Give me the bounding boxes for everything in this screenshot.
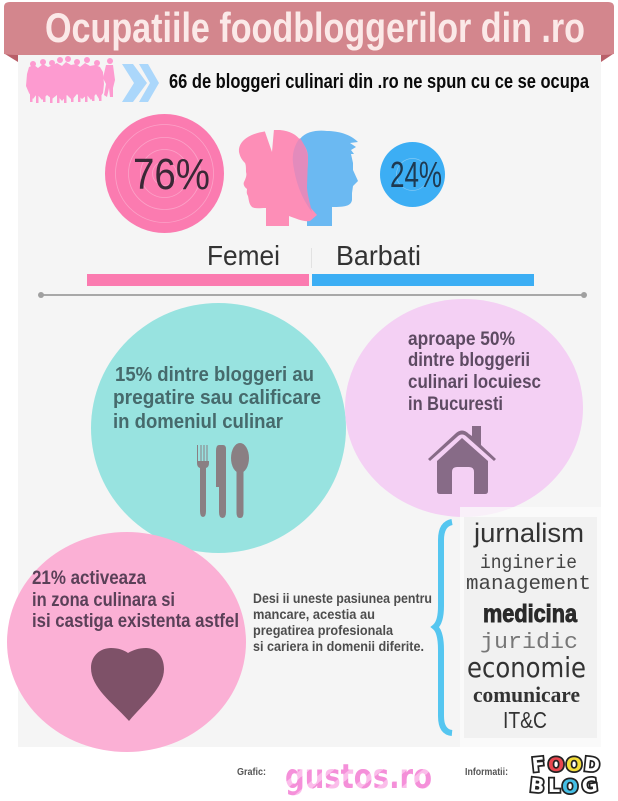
logo: gustos.ro: gustos.ro [285, 757, 432, 797]
chart: women 76% bubble [105, 114, 224, 233]
bar: women share [87, 274, 309, 286]
logo: Food Blog: G [581, 774, 599, 798]
professions word cloud: comunicare [473, 682, 580, 707]
icon: double chevron arrow [122, 64, 159, 102]
icon: heart [91, 648, 164, 721]
text: 21%: isi castiga existenta astfel [32, 611, 239, 632]
logo: Food Blog: O [566, 754, 582, 776]
text: explanation: mancare, acestia au [253, 606, 375, 622]
text: explanation: si cariera in domenii diferite. [253, 638, 424, 654]
icon: girl head silhouette [239, 129, 317, 226]
text: culinary training: 15% dintre bloggeri au [115, 364, 314, 386]
footer label: Grafic: Grafic: [237, 767, 266, 778]
text: Bucharest: culinari locuiesc [408, 372, 541, 393]
text: Bucharest [408, 329, 541, 415]
logo: Food Blog [529, 753, 601, 798]
logo: Food Blog: B [529, 774, 546, 798]
panel: culinary training circle [91, 303, 346, 553]
text: Bucharest: in Bucuresti [408, 394, 503, 415]
title banner [4, 2, 614, 62]
panel: Bucharest circle [345, 299, 583, 517]
text: culinary training: in domeniul culinar [113, 411, 283, 433]
text: culinary training: pregatire sau calificare [113, 387, 321, 409]
panel: 21% circle [7, 532, 246, 752]
text: culinary training [113, 364, 321, 433]
logo: Food Blog: D [583, 753, 601, 777]
text: 21%: in zona culinara si [32, 590, 175, 611]
logo: Food Blog: O [548, 754, 564, 776]
logo: Food Blog: L [548, 775, 560, 797]
professions word cloud [466, 518, 591, 733]
professions word cloud: jurnalism [473, 518, 584, 548]
professions word cloud: inginerie [480, 552, 577, 574]
text: 21%: 21% activeaza [32, 568, 146, 589]
text: explanation: pregatirea profesionala [253, 622, 393, 638]
chart: men 24% bubble [380, 142, 445, 207]
text: explanation: Desi ii uneste pasiunea pentru [253, 590, 432, 606]
text: explanation [253, 590, 432, 654]
professions word cloud: IT&C [503, 707, 547, 733]
label: Barbati: Barbati [336, 240, 421, 271]
logo: Food Blog: F [531, 753, 546, 777]
chart: women 76% bubble: 76% [133, 150, 210, 199]
icon: boy head silhouette [300, 131, 358, 226]
professions word cloud: management [466, 573, 591, 596]
panel: professions card [460, 507, 601, 747]
footer label: Informatii: Informatii: [465, 767, 508, 778]
text: Bucharest: dintre bloggerii [408, 350, 530, 371]
professions word cloud: juridic [480, 630, 578, 655]
bar: men share [312, 274, 534, 286]
icon: crowd silhouette [26, 56, 115, 103]
text: 21% [32, 568, 239, 632]
professions word cloud: economie [467, 651, 586, 684]
text: Bucharest: aproape 50% [408, 329, 515, 350]
icon: house [428, 426, 496, 494]
divider line [38, 292, 587, 298]
chart: men 24% bubble: 24% [390, 154, 442, 195]
label: Femei: Femei [207, 240, 280, 271]
icon: cutlery [197, 443, 249, 518]
icon: curly brace [435, 522, 452, 733]
logo: Food Blog: O [562, 776, 578, 798]
professions word cloud: medicina [483, 600, 578, 628]
